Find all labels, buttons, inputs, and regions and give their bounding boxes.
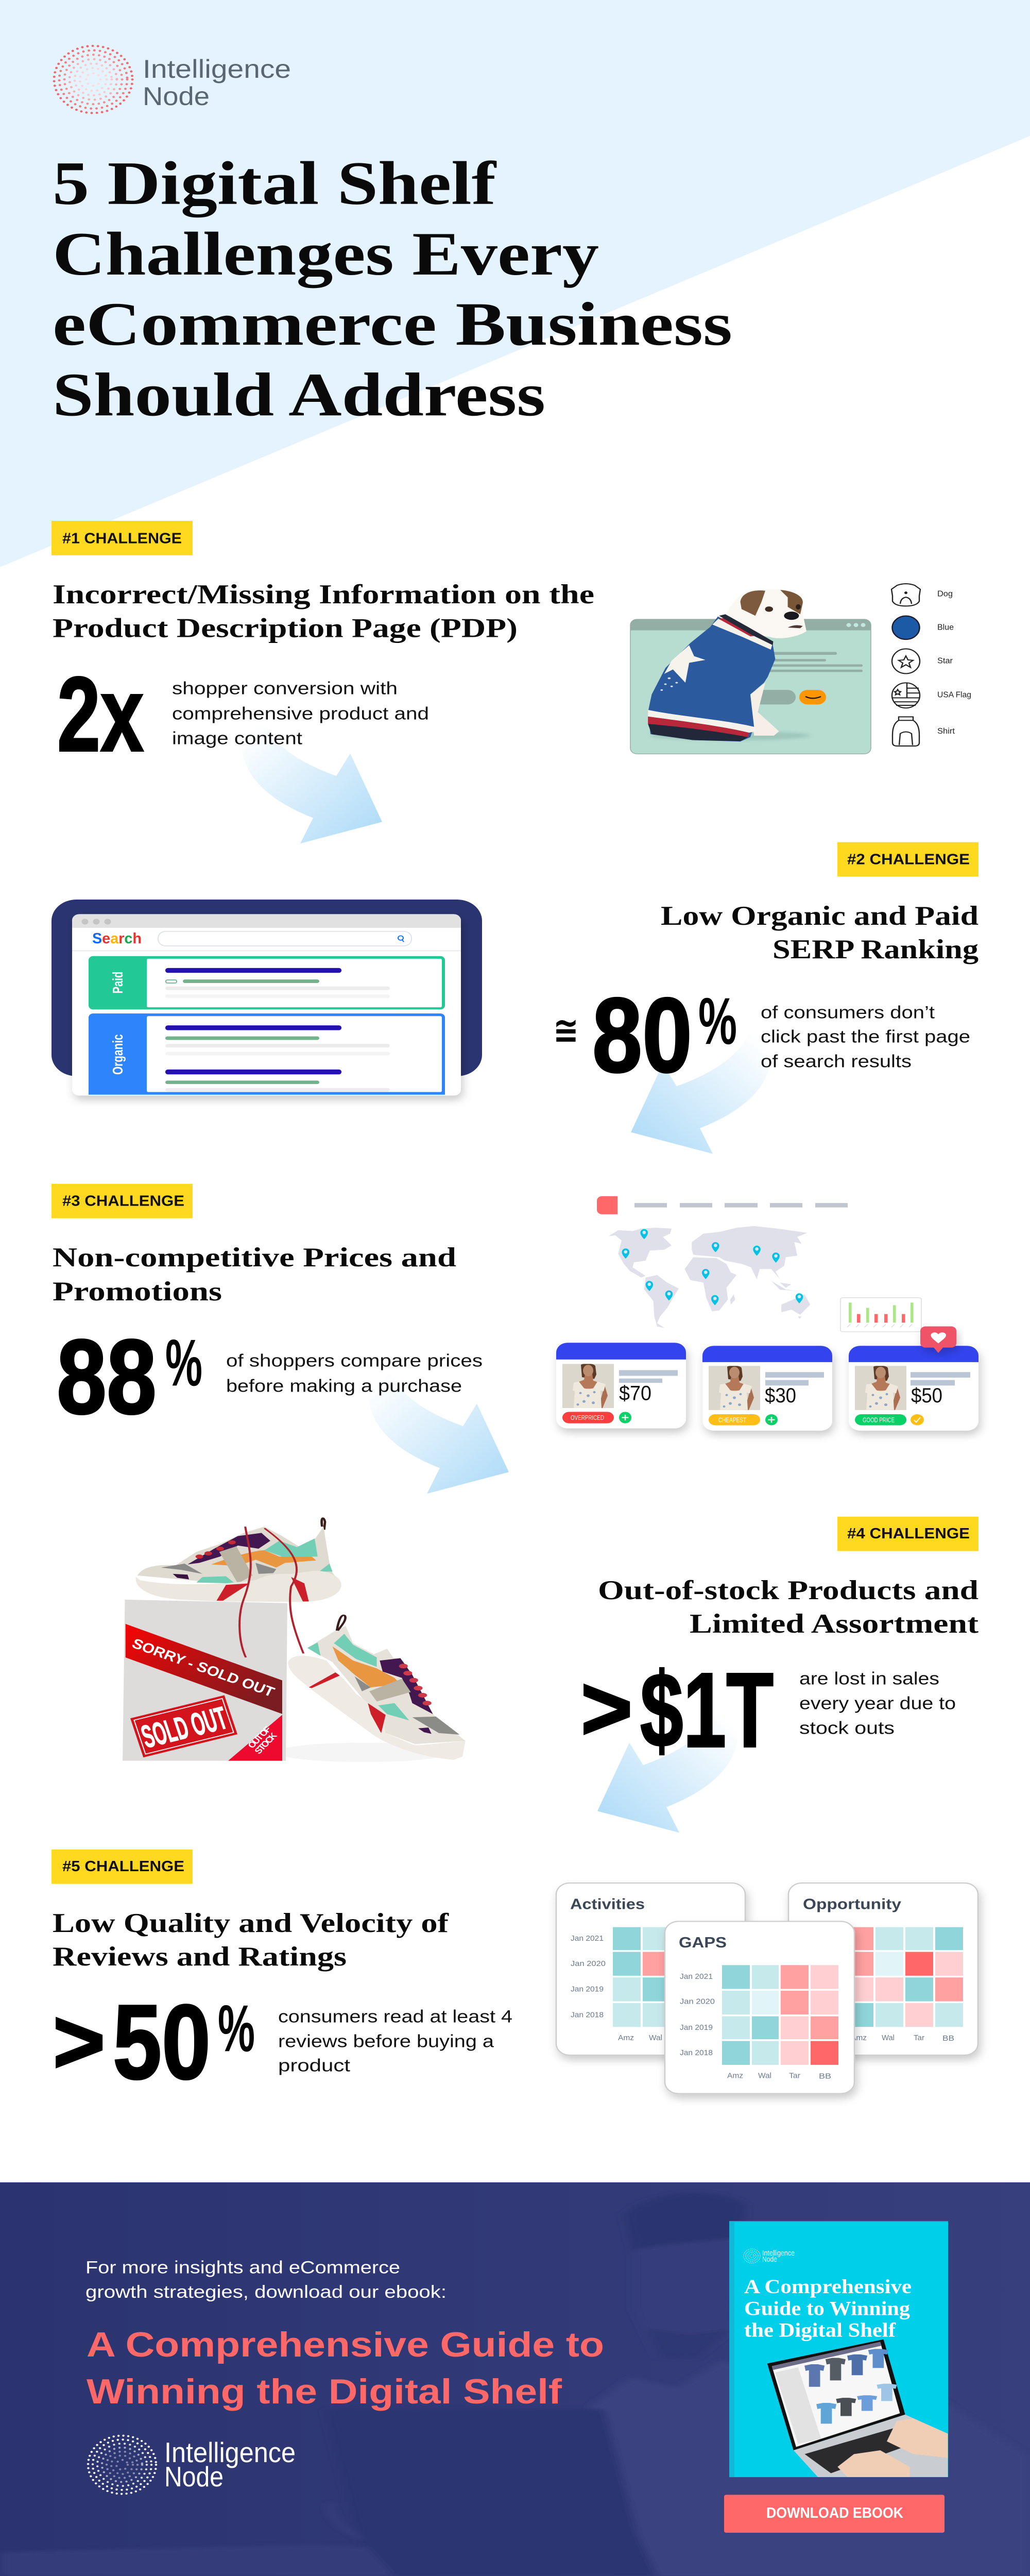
illustration: sold out box and sneakers — [123, 1518, 466, 1762]
text: stat description: of shoppers compare prices — [226, 1350, 483, 1370]
sneaker: upper — [136, 1518, 341, 1657]
illustration: search results page — [52, 900, 482, 1095]
status pill: CHEAPEST — [718, 1416, 746, 1423]
stat: approx 80%: ≅ — [553, 1009, 579, 1052]
heading: challenge 2 — [661, 901, 978, 964]
corner flag: out of stock: OUT OF — [246, 1724, 273, 1750]
corner flag: out of stock — [228, 1715, 282, 1761]
heading: challenge 3: Non-competitive Prices and — [53, 1243, 456, 1273]
card: gaps: GAPS — [679, 1934, 727, 1951]
sneaker: lower — [288, 1615, 466, 1760]
stat: 88%: % — [165, 1326, 202, 1400]
logo: Intelligence Node — [54, 46, 291, 113]
ebook title: Guide to Winning — [744, 2298, 910, 2320]
card: activities: Amz — [618, 2034, 634, 2042]
icon: check — [911, 1414, 924, 1425]
icon: shirt — [892, 717, 955, 746]
arrow: challenge 3 to 4 — [368, 1370, 509, 1494]
nav strip — [597, 1196, 848, 1214]
card: gaps: Wal — [758, 2072, 771, 2080]
heading: challenge 1: Incorrect/Missing Information on the — [53, 580, 594, 609]
footer banner — [0, 2182, 1030, 2576]
background photo: man at laptop — [0, 2192, 1030, 2576]
ebook laptop illustration — [767, 2340, 948, 2477]
icon: add — [765, 1414, 778, 1425]
icon: star: Star — [937, 656, 953, 665]
price card: overpriced — [556, 1343, 686, 1428]
stat: >50% — [53, 1983, 255, 2102]
heading: ebook title — [87, 2325, 604, 2411]
illustration: bulldog in sweater — [648, 589, 810, 741]
text: stat description — [172, 678, 429, 748]
illustration: product page window — [630, 619, 871, 754]
card: activities: Wal — [649, 2034, 662, 2042]
card: activities — [556, 1883, 745, 2055]
price card: good price — [849, 1346, 978, 1431]
card: gaps: Jan 2021 — [680, 1973, 713, 1980]
heatmap cards — [556, 1883, 978, 2094]
heading: challenge 4 — [598, 1575, 978, 1639]
background triangle — [0, 0, 1030, 567]
card: gaps: BB — [819, 2072, 831, 2080]
heading: challenge 4: Out-of-stock Products and — [598, 1575, 978, 1605]
stat: approx 80%: % — [698, 984, 737, 1058]
card: gaps: Tar — [789, 2072, 800, 2080]
card: gaps: Jan 2018 — [680, 2049, 713, 2057]
text: stat description: reviews before buying a — [278, 2031, 494, 2051]
badge: #3 challenge — [52, 1184, 193, 1218]
product photo — [709, 1366, 760, 1410]
search box — [158, 931, 411, 946]
stat: >50%: % — [218, 1991, 255, 2065]
status pill: GOOD PRICE — [863, 1416, 895, 1423]
icon list: dog attributes — [891, 584, 971, 746]
stat: 2x: 2x — [57, 655, 144, 773]
badge: #2 challenge: #2 CHALLENGE — [847, 851, 970, 868]
text: stat description — [226, 1350, 483, 1396]
icon: blue colour: Blue — [937, 623, 954, 632]
ebook logo — [744, 2249, 795, 2264]
card: opportunity: Opportunity — [803, 1896, 901, 1912]
card: opportunity: BB — [942, 2035, 954, 2042]
heading: challenge 2: Low Organic and Paid — [661, 901, 978, 931]
stat: >50%: 50 — [113, 1983, 211, 2102]
search logo: Search — [92, 929, 142, 946]
card: activities: Jan 2019 — [571, 1986, 604, 1993]
heading: challenge 5: Low Quality and Velocity of — [53, 1908, 449, 1938]
card: opportunity: Tar — [914, 2034, 924, 2042]
result block: paid: Paid — [109, 972, 126, 994]
box text: sorry sold out: SORRY - SOLD OUT — [129, 1636, 277, 1700]
logo: Intelligence Node white: Node — [164, 2461, 224, 2493]
text: call to action intro: growth strategies, download our ebook: — [85, 2282, 447, 2302]
text: call to action intro — [85, 2257, 447, 2302]
world map with pins — [609, 1226, 810, 1328]
text: stat description: before making a purchase — [226, 1376, 462, 1396]
card: activities: Jan 2018 — [571, 2011, 604, 2019]
corner flag: out of stock: STOCK — [252, 1731, 279, 1756]
heading: challenge 4: Limited Assortment — [690, 1609, 978, 1639]
text: stat description: consumers read at least 4 — [278, 2006, 512, 2026]
card: opportunity — [788, 1883, 978, 2055]
badge: #5 challenge: #5 CHALLENGE — [62, 1857, 184, 1874]
card: activities: Activities — [570, 1896, 645, 1912]
ebook title — [744, 2276, 912, 2342]
heading: challenge 2: SERP Ranking — [772, 935, 978, 964]
text: stat description: comprehensive product and — [172, 703, 429, 723]
heading: ebook title: Winning the Digital Shelf — [87, 2371, 562, 2411]
card: gaps: Jan 2019 — [680, 2024, 713, 2032]
card: opportunity: Amz — [851, 2034, 867, 2042]
icon: USA flag — [892, 683, 971, 708]
text: stat description: image content — [172, 728, 303, 748]
result block: organic — [89, 1013, 445, 1095]
card: activities: Jan 2021 — [571, 1935, 604, 1943]
panel: challenge 4 — [123, 1517, 978, 1769]
ebook title: the Digital Shelf — [744, 2319, 896, 2342]
card: activities: Jan 2020 — [571, 1960, 606, 1968]
price: $50 — [911, 1384, 942, 1407]
title: Should Address — [53, 361, 545, 429]
logo: Intelligence Node: Node — [143, 82, 210, 111]
status pill — [709, 1414, 760, 1425]
text: stat description: shopper conversion with — [172, 678, 398, 698]
text: stat description: stock outs — [799, 1718, 895, 1738]
stat: 88%: 88 — [57, 1318, 157, 1436]
logo: Intelligence Node white — [88, 2436, 296, 2494]
price: $70 — [619, 1382, 651, 1405]
text: stat description — [799, 1668, 956, 1738]
icon: USA flag: USA Flag — [937, 690, 971, 699]
button: download ebook — [724, 2495, 945, 2533]
icon: star — [892, 649, 953, 673]
icon: amazon button — [799, 690, 826, 704]
ebook logo: Node — [762, 2256, 777, 2264]
heading: ebook title: A Comprehensive Guide to — [87, 2325, 604, 2364]
text: stat description: of consumers don’t — [761, 1002, 935, 1022]
arrow: challenge 4 to 5 — [597, 1709, 738, 1833]
card: gaps: Amz — [727, 2072, 743, 2080]
icon: add — [619, 1412, 631, 1423]
arrow: challenge 1 to 2 — [242, 720, 382, 843]
card: gaps: Jan 2020 — [680, 1998, 715, 2006]
illustration: global price monitoring — [556, 1196, 978, 1431]
result block: paid — [89, 956, 445, 1009]
badge: #1 challenge: #1 CHALLENGE — [62, 530, 182, 547]
stat: >$1T — [581, 1651, 774, 1769]
stat: >$1T: $1T — [640, 1651, 774, 1769]
card: opportunity: Wal — [882, 2034, 895, 2042]
result block: organic: Organic — [109, 1034, 126, 1075]
text: stat description: of search results — [761, 1051, 912, 1071]
card: gaps — [665, 1921, 854, 2094]
floor shadow — [276, 1742, 451, 1762]
panel: challenge 2 — [52, 842, 978, 1095]
text: call to action intro: For more insights and eCommerce — [85, 2257, 400, 2277]
stat: approx 80%: 80 — [592, 976, 692, 1094]
badge: #4 challenge: #4 CHALLENGE — [847, 1524, 970, 1541]
stat: >$1T: > — [581, 1658, 632, 1758]
ebook logo: Intelligence — [762, 2249, 795, 2258]
badge: #1 challenge — [52, 521, 193, 555]
heading: challenge 5 — [53, 1908, 449, 1972]
stat: >50%: > — [53, 1991, 105, 2092]
stamp: sold out — [130, 1695, 237, 1757]
title: eCommerce Business — [53, 290, 732, 359]
badge: #3 challenge: #3 CHALLENGE — [62, 1192, 184, 1209]
title — [53, 149, 732, 429]
text: stat description — [761, 1002, 970, 1071]
mini bar chart — [840, 1298, 921, 1332]
arrow: challenge 2 to 3 — [631, 1031, 771, 1154]
price card: cheapest — [702, 1346, 832, 1431]
icon: dog — [891, 584, 953, 606]
heading: challenge 3 — [53, 1243, 456, 1307]
logo: Intelligence Node: Intelligence — [143, 55, 291, 83]
text: stat description — [278, 2006, 512, 2075]
heading: challenge 1: Product Description Page (PDP) — [53, 613, 518, 643]
icon: dog: Dog — [937, 589, 953, 598]
title: 5 Digital Shelf — [53, 149, 497, 218]
button: download ebook: DOWNLOAD EBOOK — [766, 2504, 903, 2521]
badge: #2 challenge — [837, 842, 978, 877]
panel: challenge 5 — [52, 1850, 978, 2102]
icon: shirt: Shirt — [937, 726, 955, 736]
ebook title: A Comprehensive — [744, 2276, 912, 2298]
status pill — [855, 1414, 906, 1425]
product box — [123, 1600, 287, 1761]
badge: #4 challenge — [837, 1517, 978, 1551]
text: stat description: every year due to — [799, 1693, 956, 1713]
panel: challenge 3 — [52, 1184, 978, 1436]
heading: challenge 5: Reviews and Ratings — [53, 1942, 347, 1972]
heading: challenge 3: Promotions — [53, 1277, 222, 1307]
logo: Intelligence Node white: Intelligence — [164, 2436, 296, 2468]
product photo — [562, 1364, 614, 1408]
icon: heart notification — [920, 1327, 956, 1353]
status pill — [562, 1412, 614, 1423]
heading: challenge 1 — [53, 580, 594, 643]
text: stat description: product — [278, 2055, 351, 2075]
text: stat description: are lost in sales — [799, 1668, 939, 1688]
stamp: sold out: SOLD OUT — [137, 1700, 232, 1755]
title: Challenges Every — [53, 220, 599, 289]
panel: challenge 1 — [52, 521, 971, 773]
product photo — [855, 1366, 906, 1410]
badge: #5 challenge — [52, 1850, 193, 1884]
text: stat description: click past the first page — [761, 1026, 970, 1046]
icon: blue colour — [892, 616, 954, 639]
status pill: OVERPRICED — [571, 1414, 604, 1421]
price: $30 — [765, 1384, 796, 1407]
ebook cover — [729, 2221, 948, 2477]
